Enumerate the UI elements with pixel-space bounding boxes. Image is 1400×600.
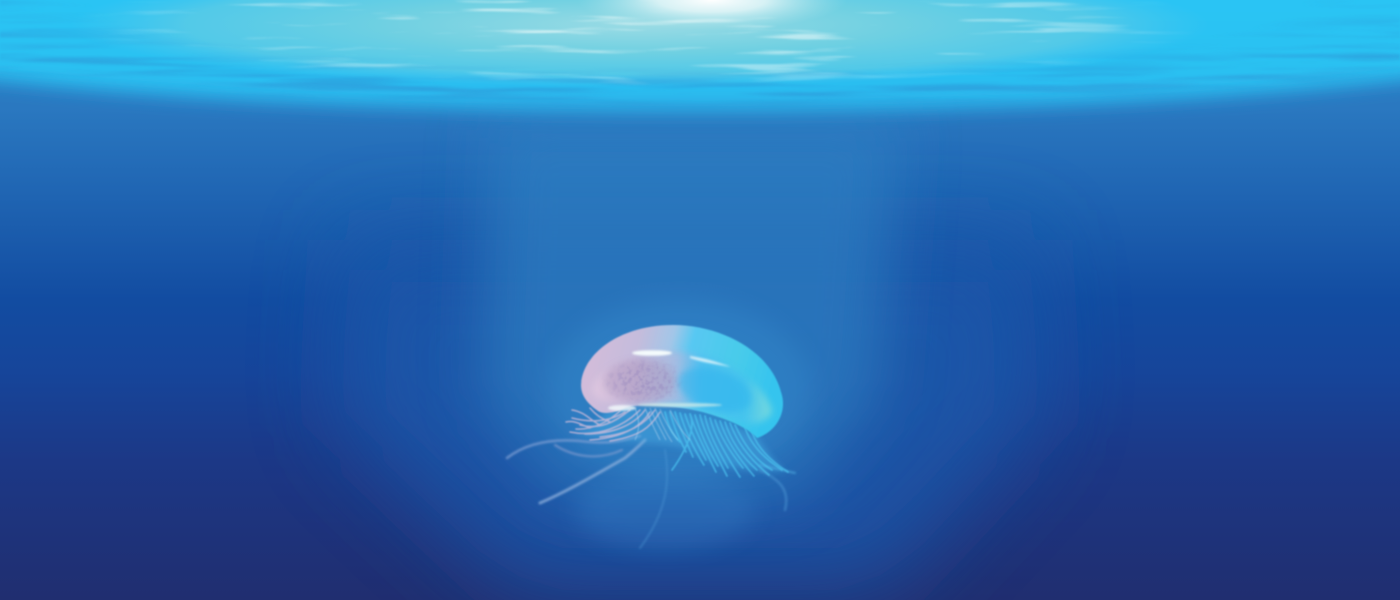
- oral arms: pale strands in the middle: [635, 408, 690, 442]
- halo behind the bell: [550, 300, 810, 480]
- bell inner body: [592, 352, 772, 424]
- bell outer dome: [581, 325, 783, 438]
- sun glow at the surface: [577, 0, 847, 30]
- oral arms: blue tentacles on the right: [665, 412, 788, 477]
- faint lower veil: [575, 470, 755, 550]
- wide blue glow around the jellyfish: [340, 240, 1040, 590]
- bright highlights on the bell: [608, 350, 731, 411]
- long trailing arms: [507, 436, 795, 548]
- tentacle veil: [572, 408, 785, 472]
- stomach mottled pink patch: [601, 357, 689, 405]
- light shaft from the surface: [480, 110, 900, 500]
- teal light pool: [70, 0, 1210, 87]
- dark ripples: [0, 1, 1400, 100]
- lower bell cyan core: [673, 359, 757, 421]
- jellyfish: [507, 300, 810, 550]
- water surface: bright cyan band: [0, 0, 1400, 120]
- oral arms: pink frills on the left: [566, 408, 660, 441]
- bright ripples: [122, 0, 1168, 85]
